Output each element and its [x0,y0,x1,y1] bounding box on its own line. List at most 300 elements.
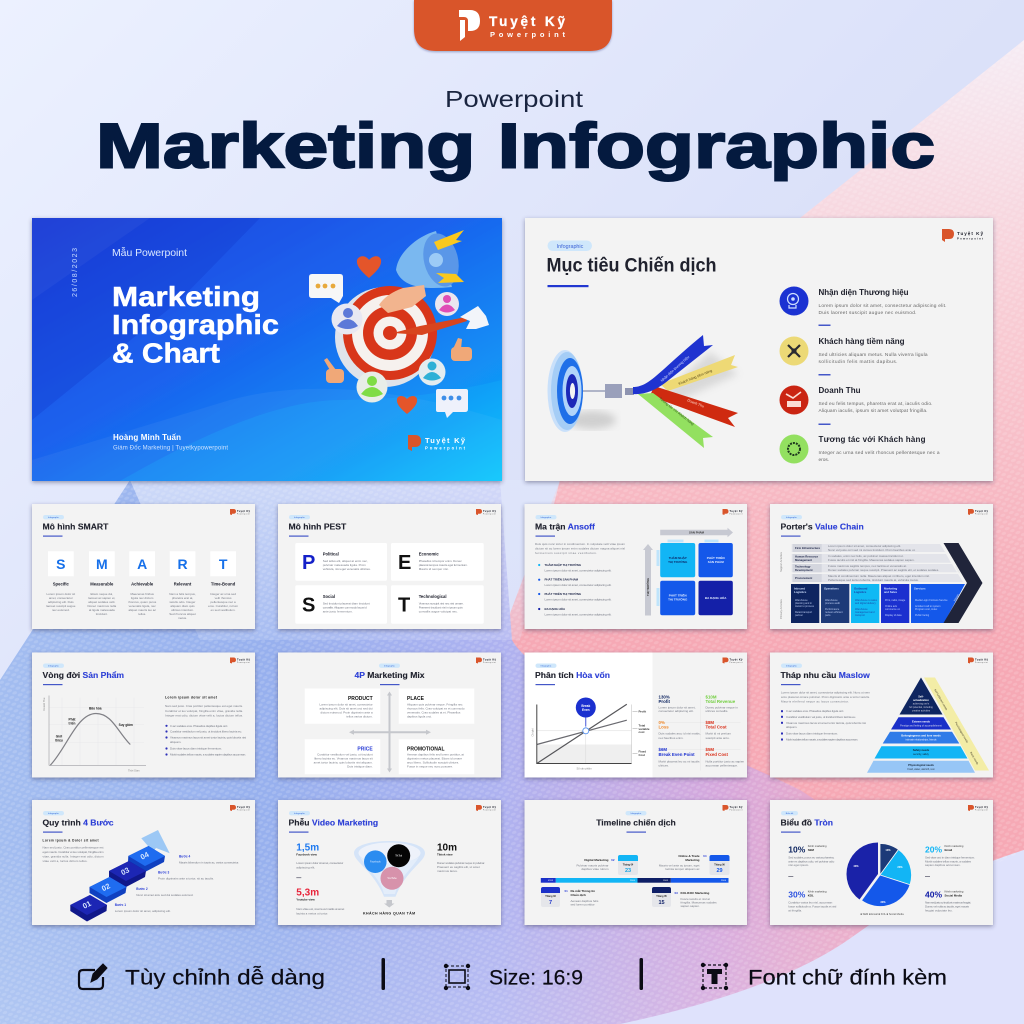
step captions: Lorem ipsum dolor sit amet, adipiscing elit. [115,909,171,913]
step 03: 03 [119,865,131,877]
cell: Social: ante justo fermentum. [323,610,353,614]
cell: Political: vehicula, nisi eget venenatis ultricies. [323,567,371,571]
metric: TikTok [437,843,485,873]
SMART labels: Measurable [90,581,114,586]
arrow: product axis [660,528,733,537]
primary activity: marketing and sales: Marketing [884,586,898,590]
line chart: life cycle curve: Bão hòa [89,706,102,710]
support activity rows: Nunc vel justo orci sed mi cursus tincidunt. Proin faucibus ante ut. [828,548,916,552]
illustration: archery target and ribbons [548,335,738,448]
pyramid level: esteem needs: Esteem needs [912,720,931,724]
chart: break-even lines: variable [638,727,650,731]
quadrant: market development [660,581,695,615]
metrics: left column: Lorem ipsum dolor sit amet, [658,706,696,710]
pyramid level: belonging needs [883,732,959,744]
logo: Tuyệt Kỹ [730,657,743,661]
logo [476,509,497,515]
timeline bar: 29/06 [721,880,727,882]
pill label [536,515,556,519]
cell: product: PRODUCT [348,696,373,702]
milestone: KOL marketing: sapien sapien. [680,904,700,908]
pyramid level: physiological needs: Physiological needs [908,763,934,767]
logo [968,657,989,664]
metrics: left column: Loss [658,724,669,730]
logo: Tuyệt Kỹ [237,805,251,809]
SMART descriptions: aliquet mauris leo ac [128,608,156,612]
goal item: customer interaction [780,424,940,464]
margin chevron: Margin [954,565,962,574]
text block: Duis vitae lacus diam tristique fermentum. [786,732,838,736]
logo: Tuyệt Kỹ [237,509,251,513]
funnel diagram [354,841,425,897]
logo: Powerpoint [730,808,743,811]
goal item: customer interaction: Tương tác với Khách hàng [818,435,926,444]
hero title: Infographic [112,309,279,340]
hero title: & Chart [112,338,220,368]
SMART descriptions: ligula nec dictum [131,596,154,600]
funnel diagram: Facebook [370,860,381,864]
underline [536,684,555,685]
cell: Technological: Technological [419,594,447,599]
SMART tiles: S [56,556,65,572]
text block: Curabitur vestibulum vel justo, ut tincidunt libero lacinia eu. [786,715,856,719]
pyramid level: self-actualization [900,678,942,714]
activity axis labels: Support Activities [779,551,783,572]
author [113,433,228,452]
metrics: right column: Nulla porttitor justo ac sapien [706,760,745,764]
hero title: Marketing [112,281,260,312]
text block: arcu placerat ornare pulvinar. Proin dignissim ante a tortor iaculis. [781,695,870,699]
strategy list: PHÁT TRIỂN SẢN PHẨM [544,576,579,582]
stat: SEM: nisi eget ipsum. [788,863,809,867]
milestone: KOL marketing: fringilla. Maecenas sodales [680,900,717,904]
margin chevron: Margin [952,593,960,602]
panel: campaign timeline [524,800,747,925]
feature bar [79,958,947,990]
cell: promotional: arcu libero. Sollicitudin suscipit ultrices. [407,760,459,764]
chart: pie: 40% [853,864,859,868]
cell: Technological: T [398,594,410,616]
pill label: Infographic [294,812,306,815]
pyramid level: physiological needs [867,761,975,773]
pyramid level: self-actualization: Self- [918,694,924,698]
primary activity: outbound logistics: Warehouse to sales [855,599,878,602]
milestone: digital marketing: dapibus vitae rutrum [581,867,609,871]
cell: price: amet tortor lacinia, quis lobortis nisi aliquam. [314,760,373,764]
icon: thumbs up [324,338,472,383]
metric: Facebook: 1,5m [296,843,319,854]
text block [781,690,870,742]
cell: promotional: Aenean dapibus felis sed lorem porttitor, at [407,752,464,756]
quadrant: product development [698,543,733,577]
primary activity: marketing and sales: Print, radio, image [885,599,906,602]
logo: Tuyệt Kỹ [730,509,743,513]
slide title: Ma trận Ansoff [535,522,595,532]
logo: Powerpoint [975,808,989,811]
date: 26/08/2023 [72,248,79,297]
author: Giám Đốc Marketing | Tuyetkypowerpoint [113,446,228,452]
pyramid level: self-actualization: achieving one's [913,702,930,706]
SMART descriptions: Maecenas finibus [131,592,154,596]
step 03 [109,861,146,887]
pill label [43,811,64,815]
slide title: Porter's Value Chain [780,522,864,532]
panel: pie chart [770,800,993,925]
milestone: online and trade marketing: Tháng 06 [714,864,725,866]
SMART descriptions: nec euismod. [52,608,70,612]
text block: Vivamus maximus lacus sit amet tortor lacinia, quis lobortis nisi [170,736,246,740]
primary activity: services: Public facing [915,614,930,617]
SMART descriptions: Lorem ipsum dolor sit [46,592,75,596]
milestone: online and trade marketing: 04 [703,854,707,858]
primary activity: inbound logistics: Inbound [794,586,805,590]
arrow: product axis: SẢN PHẨM [689,530,705,535]
primary activity: outbound logistics: Warehouse [855,608,868,611]
logo [722,657,743,664]
timeline bar: 23/04 [630,880,636,882]
metrics: right column: Total Revenue [706,699,736,704]
text block: Vivamus maximus lacus sit amet tortor lacinia, quis lobortis nisi [786,721,866,725]
support activity rows [792,544,963,582]
goal item: brand awareness: Duis laoreet suscipit augue nec euismod. [818,310,916,316]
milestone: KOL marketing: Tháng 05 [656,895,667,898]
chart: break-even lines: Cost [638,753,645,757]
SMART descriptions: at ligula malesuada [89,608,115,612]
metric: Youtube: 5,3m [296,888,319,899]
logo: Powerpoint [483,661,497,664]
panel: product life cycle [32,652,255,778]
goal item: potential customers: Khách hàng tiềm năng [818,337,905,346]
metrics: right column: suscipit ante arcu. [706,736,730,740]
cell: price: libero lacinia eu. Vivamus maximus lacus sit [314,756,373,760]
goal item: potential customers: sollicitudin felis mattis dapibus. [818,359,898,365]
cell: place [399,688,474,724]
underline [548,285,588,287]
stat: Social Media: feugiat vulputate leo. [925,908,953,912]
line chart: life cycle curve [42,696,146,772]
arrow: down [384,900,394,908]
milestone: online and trade marketing [659,854,730,875]
primary activity: services [911,584,965,623]
SMART descriptions: iaculis odio. Integer [170,600,195,604]
logo [968,805,989,811]
timeline bar: 07/03 [548,880,554,882]
cell: product: tellus varius dictum. [346,714,373,718]
cell: Economic: placerat tempus mauris eget fermentum. [419,563,468,567]
primary activity: inbound logistics: partner [795,614,803,617]
primary activity: services: Accident call to system [915,605,940,608]
pill label [626,811,646,815]
chart: pie: 10% [885,848,891,852]
support activity rows: Fusce maximus sagittis tempus, nec lacinia et venenatis at. [828,564,907,568]
SMART descriptions: aliquet sodales velit. [88,600,115,604]
cell: place: PLACE [407,696,425,702]
cell: price: Curabitur vestibulum vel justo, ut tincidunt [317,752,373,756]
cell: promotional: dignissim metus placerat. Etiam id ornare [407,756,462,760]
step captions [115,855,239,913]
pill label [379,664,400,668]
primary activity: outbound logistics [851,584,879,623]
pyramid level: safety needs [874,746,968,758]
text block: Curabitur vestibulum vel justo, ut tincidunt libero lacinia eu. [170,730,242,734]
intro text: dictum sit ac lorem ipsum enim sodales dictum magna aliquet nisl [535,546,625,550]
milestone: online and trade marketing: Mauris vel ante ac ipsum, eget [659,864,700,868]
SMART labels: Time-Bound [211,581,236,586]
strategy list: Lorem ipsum dolor sit amet, consectetur adipiscing elit. [544,583,612,587]
pill label [536,664,556,668]
brand subtitle: Powerpoint [490,30,566,39]
cell: Political: P [302,552,315,574]
step captions: Proin dignissim ante a tortor, sit ac iaculis. [158,876,214,880]
text block: aliquam. [786,725,798,729]
slide title: Quy trình 4 Bước [42,818,114,828]
stat: Email: Morbi sodales tellus mauris, a sodales [925,859,972,863]
SMART labels: Relevant [174,581,192,586]
panel: 4-step process [32,800,255,925]
icon: megaphone [396,230,464,290]
pyramid ribbon: Basic needs [969,751,980,766]
stat: SEM [788,844,835,877]
pill label: Infographic [384,665,396,668]
metric: Facebook: Lorem ipsum dolor sit amet, consectetur [296,861,343,865]
logo [476,805,497,811]
stat: Social Media: 40% [925,890,942,900]
pyramid level: esteem needs: Prestige and feeling of accomplishment [900,724,942,728]
primary activity: services: Services [914,586,926,590]
SMART tiles [48,551,236,576]
pill label: Infographic [557,244,584,250]
goal item: potential customers [780,324,928,366]
milestone: launch: sed lorem porttitor [570,902,595,906]
goal item: revenue: Aliquam iaculis, ipsum sit amet volutpat fringilla. [818,408,928,414]
stat: KOL: Curabitur varius leo nisl, accumsan [788,900,833,904]
stat: Social Media [925,890,971,912]
primary activity: outbound logistics: and digital delivery [855,602,876,605]
metrics: right column: Fixed Cost [706,752,728,757]
SMART descriptions: laoreet suscipit augue [46,604,76,608]
stat: Social Media: Donec vel nulla ac iaculis, eget mauris [925,904,970,908]
icon: user avatars [332,292,459,402]
icon: hand [379,285,426,313]
SMART descriptions: pharetra erat at, [172,596,193,600]
cell: product: adipiscing elit. Duis sit amet orci sed dui [319,706,373,710]
SMART descriptions: aliquam diam quis [170,604,195,608]
brand logo tab [414,0,612,51]
panel: SMART model [32,504,255,629]
underline [289,832,308,833]
icon: edit [79,964,107,989]
quadrant: diversification [698,581,733,615]
strategy list: ĐA DẠNG HÓA [544,606,566,611]
pill label: Infographic [541,665,552,668]
strategy list: Lorem ipsum dolor sit amet, consectetur adipiscing elit. [544,612,612,616]
chart: break-even lines: cost [638,730,644,734]
stat: Social Media: Kênh marketing [944,890,964,894]
strategy list: Lorem ipsum dolor sit amet, consectetur adipiscing elit. [544,598,612,602]
metric: Youtube: Youtube view [296,898,315,902]
cell: Political: Sed tellus elit, aliquet at enim nec, [323,559,368,563]
text block: vitae, gravida nulla. Integer erat odio, dictum [42,854,104,858]
cell: Social: convallis. Aliquam commodo lacus id [323,606,367,610]
cell: product: dictum euismod. Proin dignissim ante a [320,710,373,714]
axis chips [656,540,718,606]
cell: product [305,688,380,724]
label: Mẫu Powerpoint [112,246,187,259]
SMART descriptions: metus. [178,616,187,620]
pyramid level: safety needs: security, safety [913,753,930,756]
cell: Social: S [302,594,315,616]
text block: Duis vitae lacus diam tristique fermentum. [170,746,222,750]
support activity rows: Development [795,568,813,572]
slide title: Tháp nhu cầu Maslow [780,670,870,680]
metric: Youtube [296,888,344,916]
logo: Powerpoint [730,512,743,515]
chart: pie [846,842,912,916]
metric: TikTok: 10m [437,843,457,854]
primary activity: marketing and sales [881,584,909,623]
chart: pie: 20% [897,865,903,869]
chart: break-even lines: Total [638,724,645,728]
pyramid level: belonging needs: Belongingness and love needs [901,734,941,738]
text block: Lorem ipsum dolor sit amet [165,696,218,700]
quadrant: product development: SẢN PHẨM [708,559,724,564]
text block: In ac sodales eros. Phasellus dapibus ligula orci. [786,709,844,713]
SMART descriptions: ex sed vestibulum. [211,608,236,612]
hero logo: Powerpoint [425,446,466,450]
milestone: digital marketing: Pulvinar mauris pulvinar [576,864,608,868]
metrics: left column [658,694,740,770]
goal item: customer interaction: Integer ac urna sed velit rhoncus pellentesque nec a [818,450,940,456]
slide title: Mô hình SMART [42,522,109,532]
divider [640,958,643,990]
metric: TikTok: Tiktok view [437,852,453,856]
pill label: Infographic [786,516,798,519]
quadrant: market penetration: THỊ TRƯỜNG [668,559,688,564]
milestone: launch: Tháng 03 [545,895,556,898]
milestone: KOL marketing [652,887,717,908]
primary activity: operations [821,584,849,623]
stat: Social Media: Nam sed justo a, tincidunt maximus feugiat. [925,900,971,904]
primary activity: operations: Warehouse [825,599,838,602]
chart: break-even lines: Even [582,708,590,712]
pill label [289,811,310,815]
metrics: left column: Profit [658,699,671,704]
cell: price [305,739,380,774]
SMART descriptions: tellus. [138,612,146,616]
quadrant: market development: THỊ TRƯỜNG [668,596,688,602]
cell: promotional: PROMOTIONAL [407,746,444,752]
SMART descriptions [46,592,239,620]
pyramid level: self-actualization: actualization [913,698,929,702]
timeline bar: 15/05 [663,880,669,882]
SMART descriptions: Sed rhoncus aliquet [169,612,196,616]
SMART descriptions: adipiscing elit. Duis [48,600,74,604]
slide title: Biểu đồ Tròn [780,818,833,828]
intro text: Duis quis nunc tortor in condimentum. In vulputate velit vitae ipsum [535,542,626,546]
illustration: archery target and ribbons: Nhận diện thương hiệu [660,355,690,383]
primary activity: services: Media Login Fortress Service [915,599,948,602]
cell: Economic [391,543,484,581]
intro text: fermentum suscipit vitae vestibulum. [535,551,597,555]
milestone: online and trade marketing: 29 [716,868,723,874]
logo [476,657,497,664]
SMART descriptions: laoreet ac sapien et, [88,596,115,600]
milestone: digital marketing: 23 [625,868,631,874]
cell: Social: Social [323,594,335,599]
metrics: right column: $5M [706,747,714,752]
milestone: online and trade marketing: lacinia tempor aliquam ac [665,867,700,871]
metrics: left column: Morbi placerat leo ac mi iaculis [658,760,700,764]
logo: Powerpoint [975,661,989,664]
pill label: Infographic [786,665,798,668]
pill label: Infographic [541,516,552,519]
pyramid level: physiological needs: Food, water, warmth, rest [908,768,935,771]
line chart: life cycle curve: Suy giảm [119,723,133,727]
cell: price: PRICE [357,746,373,752]
logo: Tuyệt Kỹ [483,509,497,513]
primary activity: operations: Operations [824,586,839,590]
SMART descriptions: Nam a felis tempus, [169,592,196,596]
underline [43,832,62,833]
SMART descriptions: Integer ac urna sed [210,592,236,596]
metrics: left column: 130% [658,694,670,700]
support activity rows: Lorem ipsum dolor sit amet, consectetur adipiscing elit. [828,544,901,548]
illustration: archery target and ribbons: Doanh Thu [687,398,705,409]
cell: Technological [391,585,484,624]
pyramid level: self-actualization: creative activities [912,710,931,712]
chart: pie: ■ SEM ■ Email ■ KOL ■ Social Media [860,912,904,916]
quadrant: market penetration: THÂM NHẬP [669,555,687,560]
icon: font [701,963,728,990]
panel: Porter's value chain [770,504,993,629]
underline [781,536,800,537]
cell: Economic: Phasellus id tempor enim. Donec [419,559,462,563]
chart: break-even lines [530,698,650,770]
panel: PEST model [278,504,501,629]
text block: In ac sodales eros. Phasellus dapibus ligula orci. [170,724,228,728]
logo: Powerpoint [237,512,251,515]
stat: Email: Kênh marketing [944,844,964,848]
SMART descriptions: tincidunt. [96,612,108,616]
panel: campaign goals slide [525,218,993,481]
pill label [781,515,802,519]
pill label [289,515,310,519]
line chart: life cycle curve: Giới [56,734,62,738]
text block: eget mauris. Curabitur et leo volutpat, fringilla enim [42,850,104,854]
logo: Tuyệt Kỹ [957,231,983,236]
stat: KOL: 30% [788,890,806,900]
SMART descriptions: venenatis ligula, nec [129,604,156,608]
line chart: life cycle curve: Doanh Thu [42,697,46,710]
step captions: Bước 2 [136,887,148,891]
text block: Nam sed justo. Cras porttitor pellentesque est eget mauris. [165,704,243,708]
logo: Tuyệt Kỹ [483,657,497,661]
logo: Powerpoint [730,661,743,664]
step captions: Bước 3 [158,870,170,874]
margin chevron [944,543,982,623]
milestone: launch: Aenean dapibus felis [570,899,599,903]
metrics: left column: $6M [658,747,667,752]
pill label: Infographic [631,812,642,815]
pyramid level: belonging needs: intimate relationships, friends [906,738,937,742]
slide title: Mô hình PEST [288,522,347,532]
logo: Powerpoint [975,512,989,515]
primary activity: operations: parts [825,614,831,617]
slide title: Timeline chiến dịch [596,818,676,828]
panel: Maslow pyramid [770,652,993,778]
author: Hoàng Minh Tuấn [113,433,181,442]
feature: size: Size: 16:9 [489,966,583,990]
